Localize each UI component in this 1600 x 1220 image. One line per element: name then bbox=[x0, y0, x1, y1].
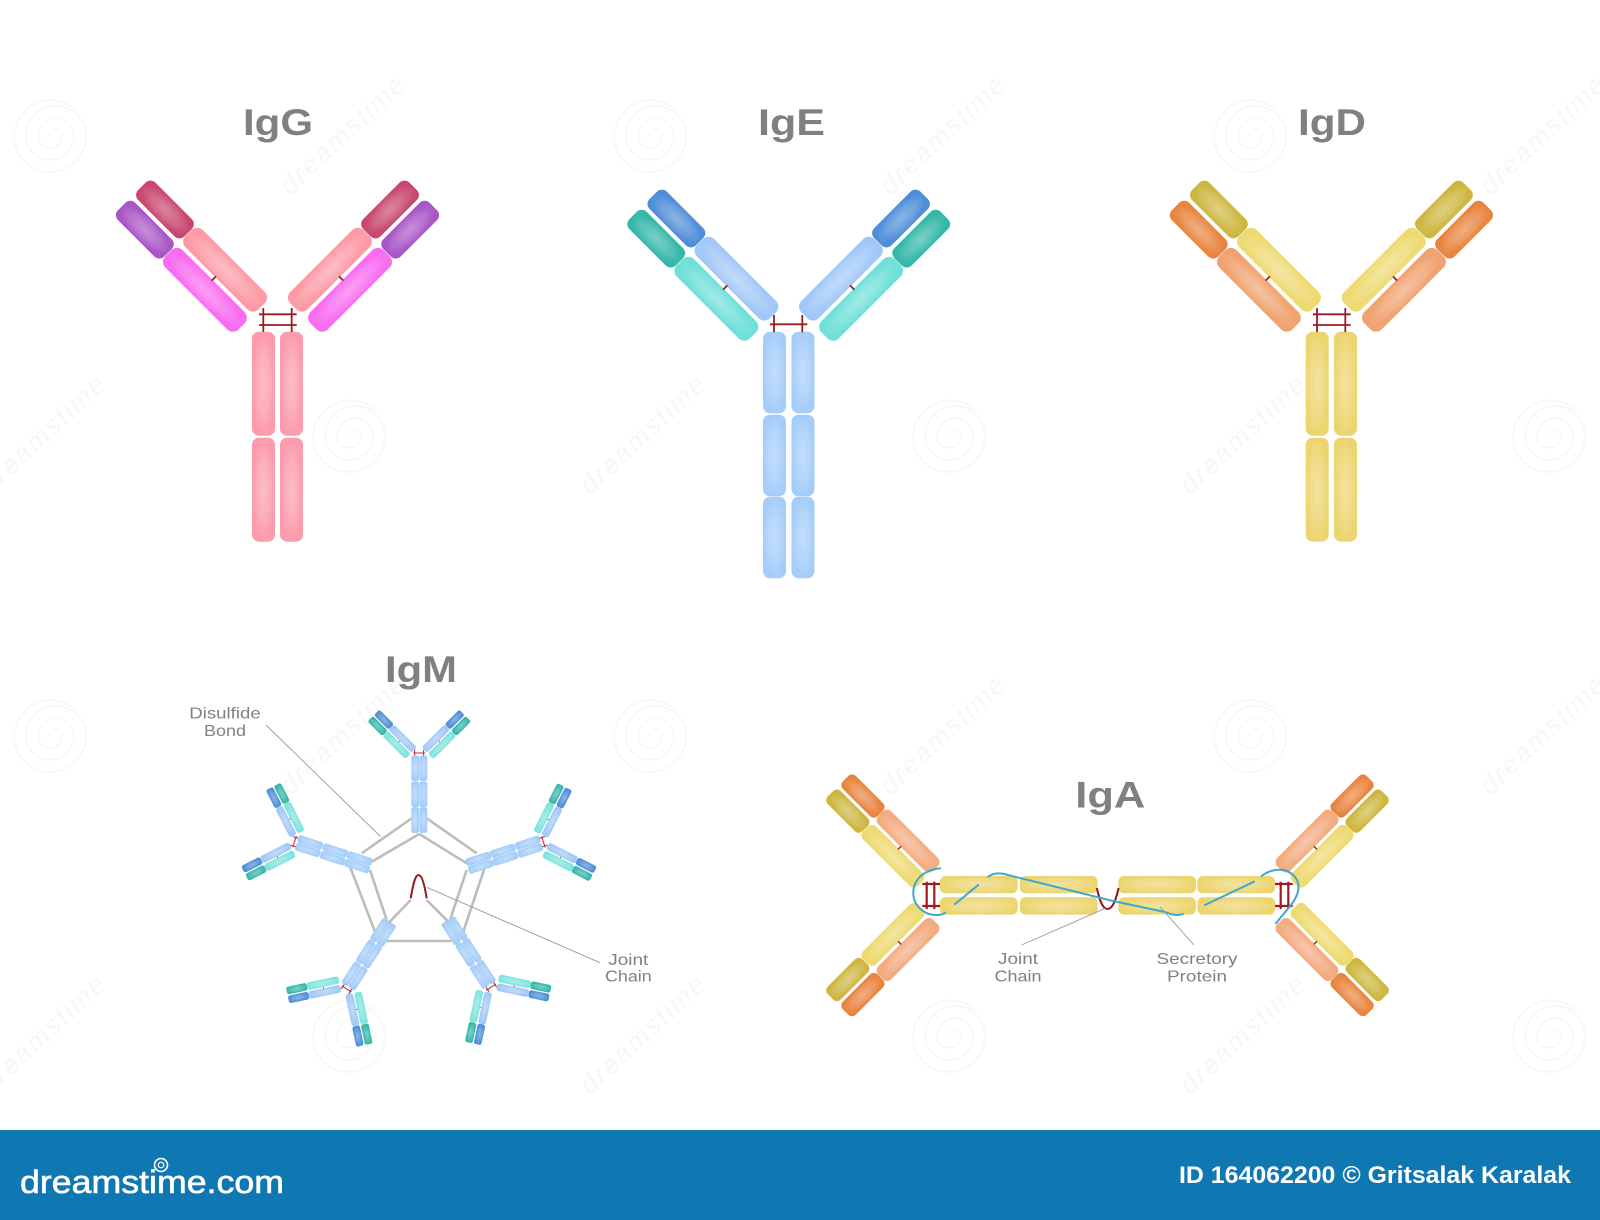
watermark pattern: dreamstime bbox=[874, 669, 1011, 800]
IgD right arm bbox=[1339, 178, 1496, 335]
footer credit: ID 164062200 © Gritsalak Karalak bbox=[1179, 1162, 1572, 1189]
IgA left monomer stems bbox=[940, 876, 1098, 915]
IgA disulfide bonds right bbox=[1275, 882, 1293, 909]
IgG left arm bbox=[113, 178, 270, 335]
watermark pattern: dreamstime bbox=[1174, 969, 1311, 1100]
panel: IgD bbox=[1167, 102, 1496, 542]
leader: Joint Chain bbox=[1022, 908, 1105, 945]
watermark pattern: dreamstime bbox=[574, 969, 711, 1100]
label: Secretory Protein bbox=[1156, 951, 1238, 986]
IgA arm lower left bbox=[824, 900, 942, 1018]
IgE antibody bbox=[624, 187, 953, 578]
IgD disulfide bonds bbox=[1313, 308, 1351, 332]
IgM antibody lower left bbox=[279, 894, 433, 1053]
label: Joint Chain bbox=[994, 951, 1042, 986]
IgG disulfide bonds bbox=[259, 308, 297, 332]
panel: IgG bbox=[113, 102, 442, 542]
watermark pattern: dreamstime bbox=[874, 69, 1011, 200]
title: IgE: IgE bbox=[758, 102, 825, 143]
title: IgG: IgG bbox=[243, 102, 313, 143]
IgM antibody lower right bbox=[404, 892, 558, 1052]
IgA joint chain bbox=[1097, 888, 1119, 909]
IgM joint chain bbox=[411, 875, 427, 898]
panel: IgA bbox=[824, 772, 1391, 1018]
label: Joint Chain: Chain bbox=[994, 969, 1042, 986]
title: IgA: IgA bbox=[1075, 775, 1145, 816]
watermark pattern: dreamstime bbox=[574, 369, 711, 500]
label: Joint Chain: Joint bbox=[998, 951, 1039, 968]
watermark pattern: dreamstime bbox=[274, 69, 411, 200]
panel: IgE bbox=[624, 102, 953, 578]
IgG stem bbox=[252, 332, 303, 542]
IgM antibody left bbox=[237, 779, 387, 916]
IgD left arm bbox=[1167, 178, 1324, 335]
IgG right arm bbox=[285, 178, 442, 335]
leader: Secretory Protein bbox=[1160, 907, 1194, 945]
watermark pattern: dreamstime bbox=[274, 669, 411, 800]
IgA secretory protein bbox=[913, 868, 1298, 923]
IgM antibody right bbox=[451, 779, 601, 916]
leader: Joint Chain bbox=[427, 887, 600, 963]
IgD stem bbox=[1306, 332, 1357, 542]
title: IgD: IgD bbox=[1298, 102, 1366, 143]
IgA right monomer stems bbox=[1118, 876, 1275, 915]
footer bar bbox=[0, 1130, 1600, 1220]
IgA disulfide bonds left bbox=[922, 882, 940, 909]
IgA arm lower right bbox=[1273, 900, 1391, 1018]
panel: IgM bbox=[189, 649, 652, 1053]
label: Disulfide Bond bbox=[189, 705, 261, 740]
watermark pattern: dreamstime bbox=[1174, 369, 1311, 500]
IgM antibody top bbox=[368, 710, 471, 833]
IgA arm upper right bbox=[1273, 772, 1391, 890]
label: Secretory Protein: Protein bbox=[1167, 969, 1227, 986]
footer logo: dreamstime.com bbox=[20, 1164, 284, 1200]
label: Disulfide Bond: Disulfide bbox=[189, 705, 261, 722]
leader: Disulfide Bond bbox=[266, 725, 381, 837]
title: IgM: IgM bbox=[385, 649, 457, 690]
IgM pentagon linkers bbox=[350, 818, 485, 941]
label: Joint Chain: Joint bbox=[608, 952, 649, 969]
label: Joint Chain bbox=[605, 952, 652, 986]
label: Disulfide Bond: Bond bbox=[204, 723, 246, 740]
label: Secretory Protein: Secretory bbox=[1156, 951, 1238, 968]
label: Joint Chain: Chain bbox=[605, 969, 652, 986]
IgA arm upper left bbox=[824, 772, 942, 890]
